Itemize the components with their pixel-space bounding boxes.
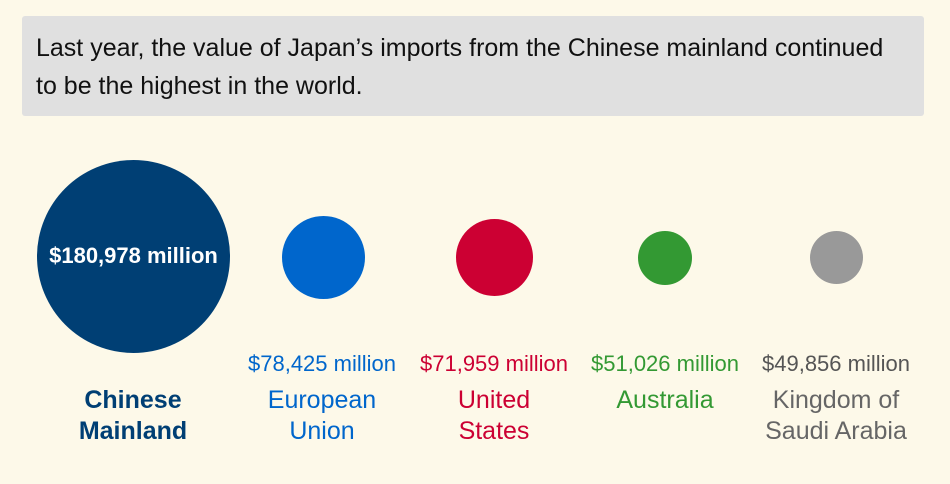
circle: Australia xyxy=(638,231,692,285)
label: US: United xyxy=(458,386,530,414)
label: US: States xyxy=(459,417,529,445)
header: to be the highest in the world. xyxy=(36,72,363,100)
label: Chinese Mainland: Chinese xyxy=(84,386,182,414)
label: Saudi: Kingdom of xyxy=(773,386,899,414)
label: Australia: Australia xyxy=(616,386,714,414)
label: Chinese Mainland: Mainland xyxy=(79,417,187,445)
label: Saudi: Saudi Arabia xyxy=(765,417,907,445)
label: EU xyxy=(268,386,376,445)
label: EU: Union xyxy=(289,417,355,445)
value: EU: $78,425 million xyxy=(248,351,396,376)
circle: Saudi xyxy=(810,231,863,284)
header xyxy=(22,16,924,116)
label: Saudi xyxy=(765,386,907,445)
circle: EU xyxy=(282,216,365,299)
label: US xyxy=(458,386,530,445)
value: Australia: $51,026 million xyxy=(591,351,739,376)
value: US: $71,959 million xyxy=(420,351,568,376)
circle: Chinese Mainland xyxy=(37,160,230,353)
label: EU: European xyxy=(268,386,376,414)
circle: Chinese Mainland: $180,978 million xyxy=(49,243,218,268)
header: Last year, the value of Japan’s imports from the Chinese mainland continued xyxy=(36,34,883,62)
circle: US xyxy=(456,219,533,296)
value: Saudi: $49,856 million xyxy=(762,351,910,376)
label: Chinese Mainland xyxy=(79,386,187,445)
